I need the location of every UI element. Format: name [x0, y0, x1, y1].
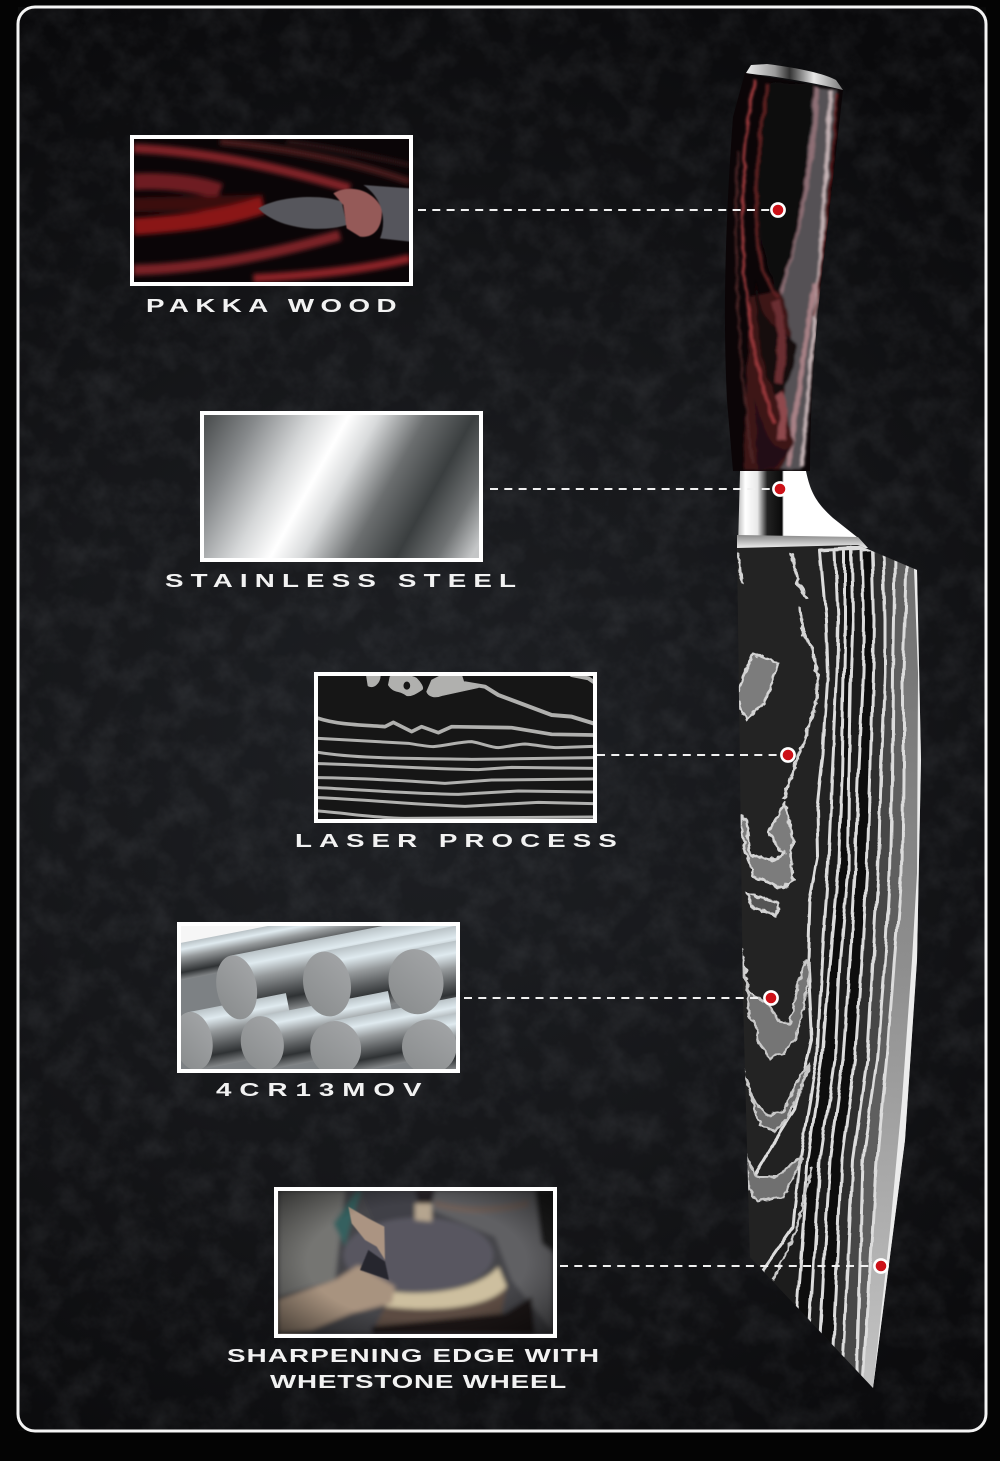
knife handle: pakka wood [725, 64, 843, 471]
laser pattern swatch [314, 672, 597, 823]
label: laser process: LASER PROCESS [295, 831, 617, 851]
marker dots [764, 203, 888, 1273]
handle end cap [746, 64, 843, 90]
knife [725, 64, 921, 1388]
label: stainless steel: STAINLESS STEEL [165, 571, 516, 591]
callout 5: whetstone [227, 1187, 873, 1392]
stainless steel swatch [200, 411, 483, 562]
label: 4CR13MOV: 4CR13MOV [216, 1080, 422, 1100]
connector 4 [464, 997, 763, 999]
connector 2 [490, 488, 772, 490]
label: pakka wood: PAKKA WOOD [146, 296, 396, 316]
callout 2: stainless steel [165, 411, 772, 591]
connector 1 [418, 209, 770, 211]
upper blade pattern [737, 553, 817, 980]
label: sharpening edge with whetstone wheel [227, 1346, 599, 1392]
label: sharpening edge with whetstone wheel: SHARPENING EDGE WITH [227, 1346, 599, 1366]
bolster [737, 471, 868, 552]
connector 3 [597, 754, 780, 756]
pakka wood swatch [130, 135, 413, 286]
blade with damascus pattern [737, 545, 921, 1388]
whetstone photo swatch [274, 1187, 558, 1338]
callout 1: pakka wood [130, 135, 770, 316]
steel rods swatch [177, 922, 460, 1073]
label: sharpening edge with whetstone wheel: WHETSTONE WHEEL [270, 1372, 566, 1392]
connector 5 [560, 1265, 873, 1267]
callout 3: laser process [295, 672, 780, 851]
lower blade pattern [740, 960, 812, 1280]
callout 4: 4CR13MOV [151, 885, 763, 1100]
